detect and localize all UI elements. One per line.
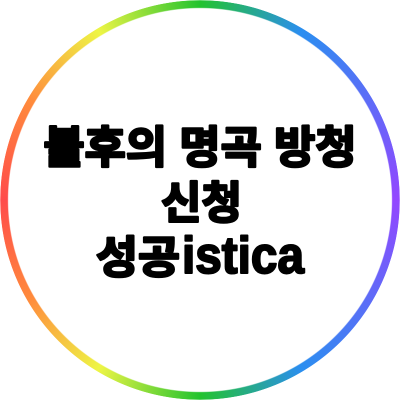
title line 2: 신청 [161,179,242,228]
title line 3 [96,227,305,285]
title line 1: 불후의 명곡 방청 [44,124,356,172]
title line 3: 성공 [96,234,180,282]
title line 3: istica [182,227,305,285]
